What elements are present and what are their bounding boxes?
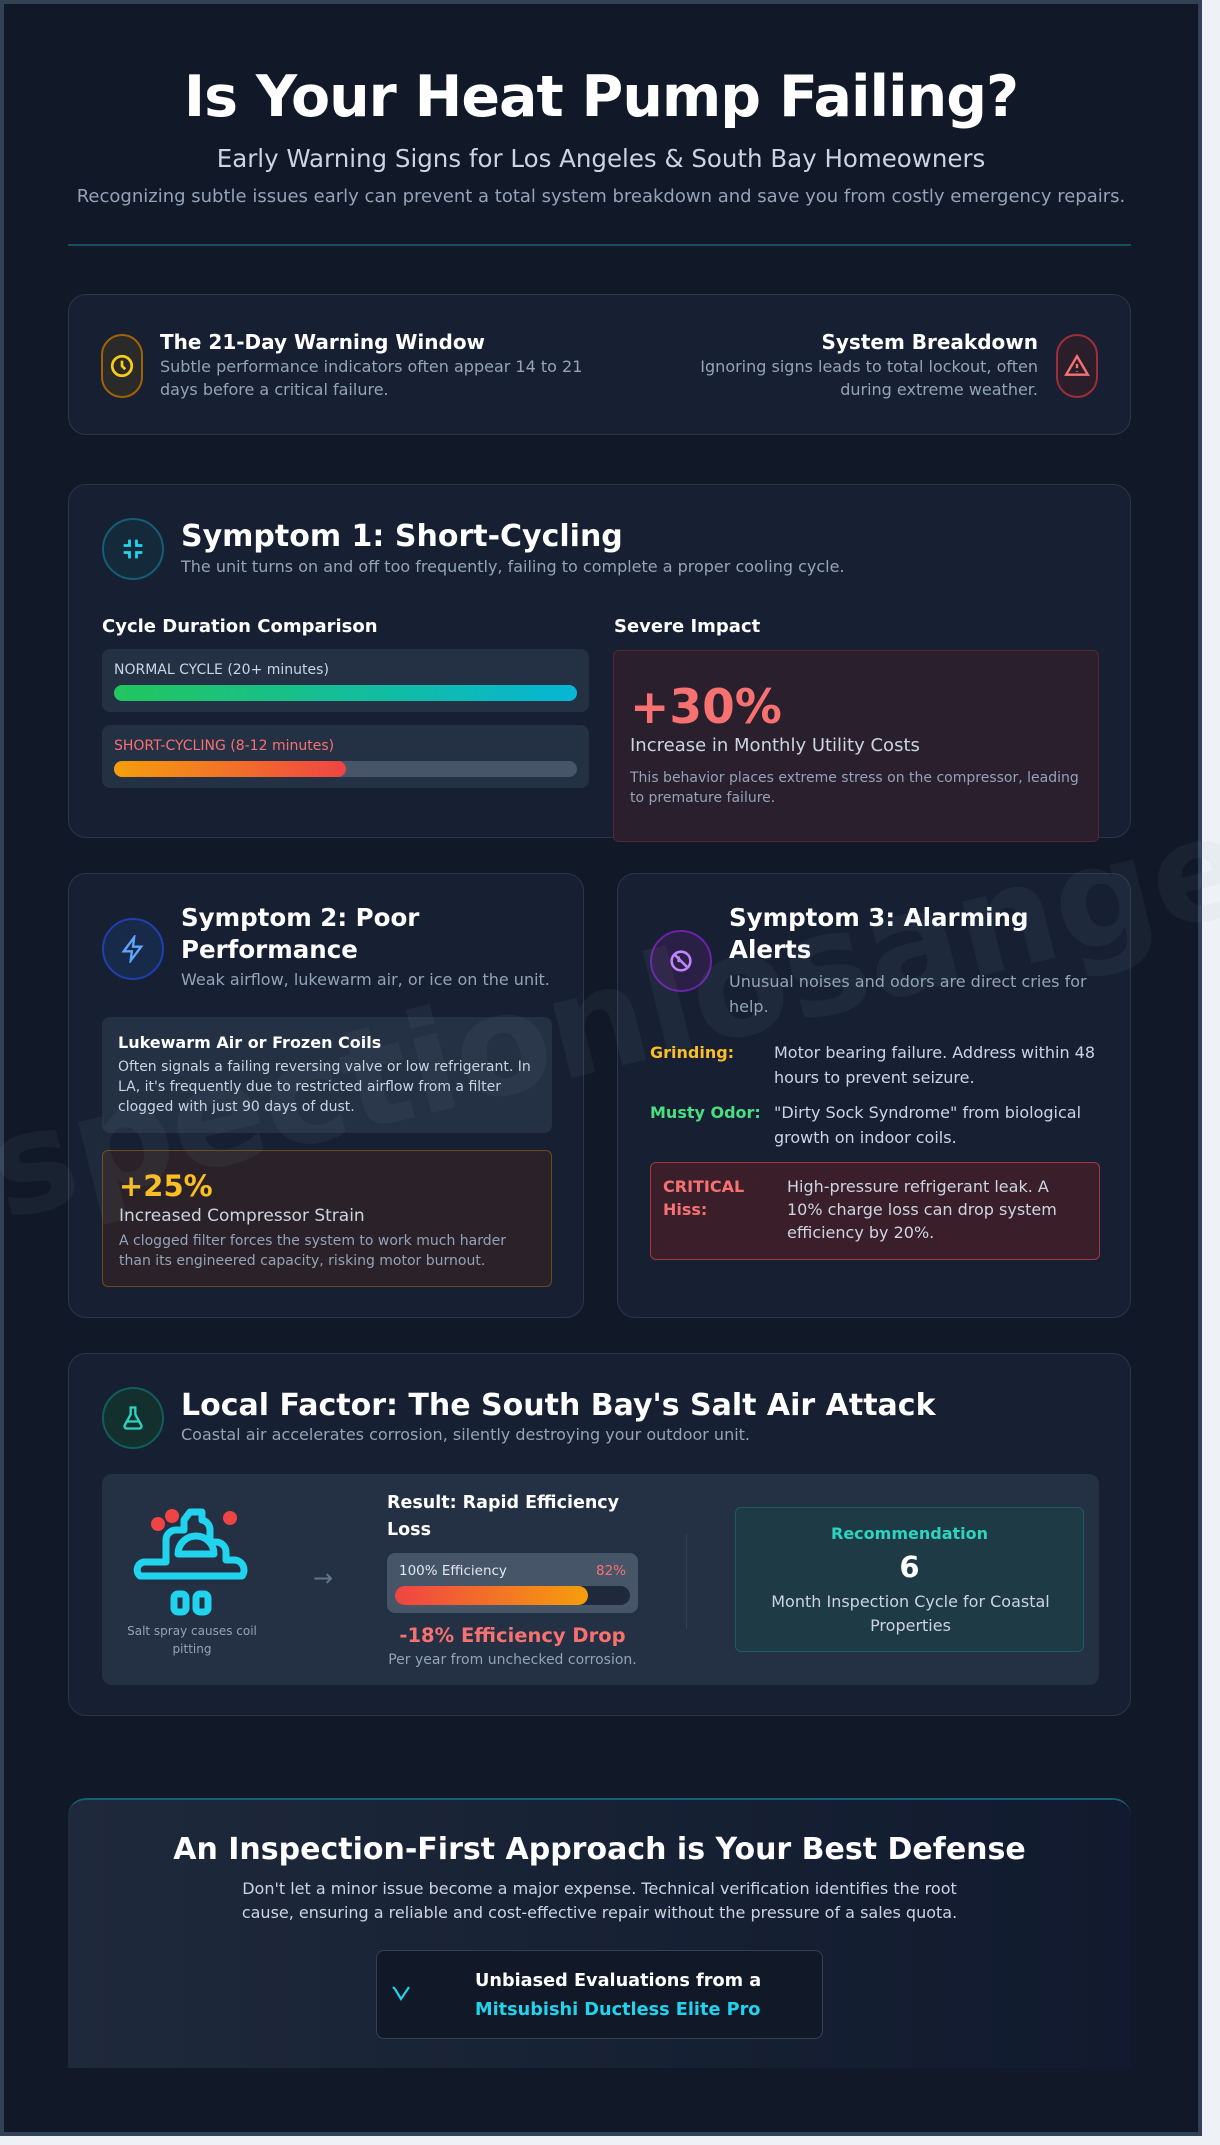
subtitle: Early Warning Signs for Los Angeles & South Bay Homeowners	[217, 144, 985, 173]
heading: Performance	[181, 935, 358, 964]
inner box: Per year from unchecked corrosion.	[388, 1652, 637, 1668]
row: grinding	[650, 1043, 1095, 1087]
panel: symptom 3: Grinding:	[650, 1043, 734, 1062]
callout: +25%: A clogged filter forces the system to work much harder than its engineered capacity, risking motor burnout.	[119, 1233, 506, 1269]
icon: short cycle	[102, 518, 164, 580]
callout: +25%	[102, 1150, 552, 1287]
result: efficiency loss: Loss	[387, 1520, 431, 1540]
badge: Unbiased Evaluations from a	[475, 1971, 761, 1991]
heading	[181, 903, 420, 964]
bar: short cycling: SHORT-CYCLING (8-12 minutes)	[114, 738, 334, 754]
panel: call to action	[68, 1798, 1131, 2068]
heading: Local Factor: The South Bay's Salt Air Attack	[181, 1388, 936, 1423]
callout: +25%: Increased Compressor Strain	[119, 1206, 365, 1226]
icon: warning	[1056, 334, 1098, 398]
heading: Alerts	[729, 935, 811, 964]
callout: critical hiss: CRITICAL	[663, 1177, 744, 1196]
heading: An Inspection-First Approach is Your Best Defense	[173, 1832, 1026, 1867]
badge	[376, 1950, 823, 2039]
callout: critical hiss: Hiss:	[663, 1200, 707, 1219]
bar: efficiency	[387, 1553, 638, 1613]
heading: Symptom 2: Poor	[181, 903, 419, 932]
result: efficiency loss	[387, 1493, 638, 1668]
callout: +30%: This behavior places extreme stress on the compressor, leading to premature failure.	[630, 770, 1079, 806]
panel: symptom 1	[68, 484, 1131, 838]
callout: recommendation: Recommendation	[831, 1524, 988, 1543]
inner box: -18% Efficiency Drop	[399, 1624, 626, 1647]
text: 21-day window: Subtle performance indicators often appear 14 to 21	[160, 357, 582, 376]
callout: +25%: +25%	[119, 1169, 213, 1203]
impact heading: Severe Impact	[614, 616, 760, 637]
icon: clock	[101, 334, 143, 398]
heading	[729, 903, 1029, 964]
callout: +30%: +30%	[630, 680, 782, 735]
callout: +30%	[613, 650, 1099, 842]
text: system breakdown: during extreme weather.	[840, 380, 1038, 399]
text block: lukewarm: Lukewarm Air or Frozen Coils	[118, 1033, 381, 1052]
intro text: Recognizing subtle issues early can prevent a total system breakdown and save you from costly emergency repairs.	[77, 186, 1125, 207]
panel: warning window	[68, 294, 1131, 435]
icon: flask	[102, 1387, 164, 1449]
row: musty odor	[650, 1103, 1081, 1147]
bar: normal: NORMAL CYCLE (20+ minutes)	[114, 662, 329, 678]
callout: recommendation: 6	[899, 1550, 920, 1584]
body text: Don't let a minor issue become a major expense. Technical verification identifies the root cause, ensuring a reliable and cost-effective repair without the pressure of a sales quota.	[242, 1879, 957, 1922]
panel: salt air	[68, 1353, 1131, 1716]
callout: recommendation	[735, 1507, 1084, 1652]
result: efficiency loss: Result: Rapid Efficiency	[387, 1493, 619, 1513]
text: system breakdown: Ignoring signs leads to total lockout, often	[700, 357, 1038, 376]
text: system breakdown: System Breakdown	[821, 330, 1038, 354]
bar: short cycling	[102, 725, 589, 788]
arrow: →	[313, 1564, 333, 1592]
panel: salt air: Coastal air accelerates corrosion, silently destroying your outdoor unit.	[181, 1425, 750, 1444]
title: Is Your Heat Pump Failing?	[184, 64, 1018, 130]
panel: symptom 3: Motor bearing failure. Address within 48 hours to prevent seizure.	[774, 1043, 1095, 1087]
heading: Symptom 1: Short-Cycling	[181, 519, 623, 554]
panel: symptom 3: Unusual noises and odors are direct cries for help.	[729, 972, 1087, 1016]
bar: efficiency: 100% Efficiency	[399, 1563, 507, 1579]
text: 21-day window: days before a critical failure.	[160, 380, 389, 399]
icon: bolt	[102, 918, 164, 980]
bar: normal	[102, 649, 589, 712]
text: system breakdown	[700, 330, 1038, 399]
panel: symptom 3	[617, 873, 1131, 1318]
icon: alert	[650, 930, 712, 992]
text: 21-day window: The 21-Day Warning Window	[160, 330, 485, 354]
panel: symptom 3: "Dirty Sock Syndrome" from biological growth on indoor coils.	[774, 1103, 1081, 1147]
icon: check	[392, 1986, 410, 2001]
icon: corroded unit	[127, 1508, 257, 1656]
callout: +30%: Increase in Monthly Utility Costs	[630, 735, 920, 756]
text block: lukewarm: Often signals a failing reversing valve or low refrigerant. In LA, it's frequently due to restricted airflow from a filter clogged with just 90 days of dust.	[118, 1059, 531, 1115]
panel: symptom 2	[68, 873, 584, 1318]
panel: symptom 1: The unit turns on and off too frequently, failing to complete a proper cooling cycle.	[181, 557, 845, 576]
panel: symptom 3: Musty Odor:	[650, 1103, 761, 1122]
panel: symptom 2: Weak airflow, lukewarm air, or ice on the unit.	[181, 970, 550, 989]
callout: critical hiss	[650, 1162, 1100, 1260]
heading: Symptom 3: Alarming	[729, 903, 1029, 932]
text block: lukewarm	[102, 1017, 552, 1133]
text: 21-day window	[160, 330, 582, 399]
chart heading: Cycle Duration Comparison	[102, 616, 378, 637]
bar: efficiency: 82%	[596, 1563, 626, 1579]
inner box	[102, 1474, 1099, 1685]
callout: critical hiss: High-pressure refrigerant leak. A 10% charge loss can drop system efficiency by 20%.	[787, 1177, 1057, 1242]
icon: corroded unit: Salt spray causes coil pitting	[127, 1624, 257, 1656]
callout: recommendation: Month Inspection Cycle for Coastal Properties	[771, 1592, 1050, 1635]
badge: Mitsubishi Ductless Elite Pro	[475, 2000, 760, 2020]
